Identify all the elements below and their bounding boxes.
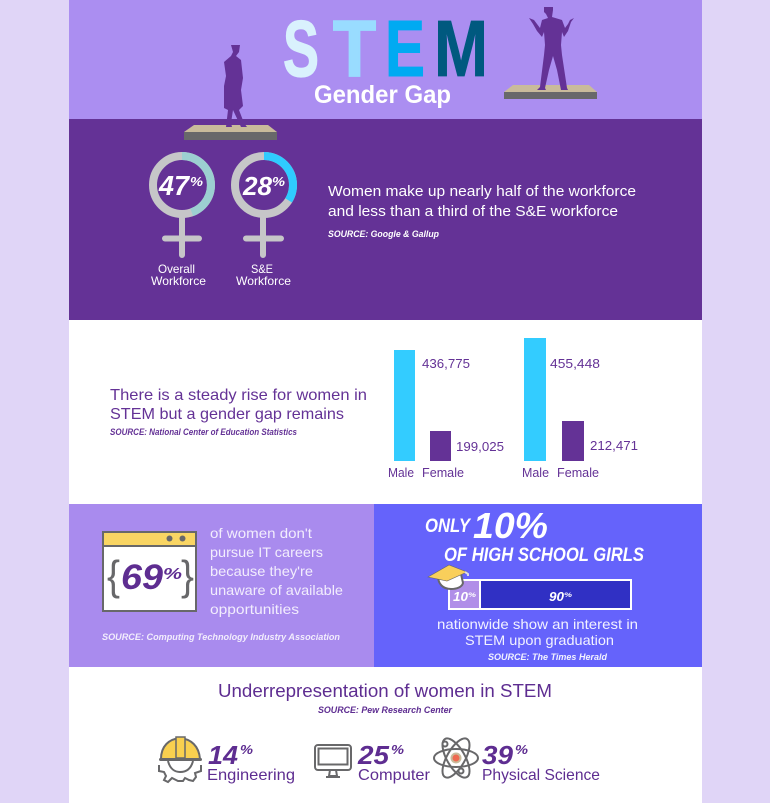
text: nationwide statement: STEM upon graduation — [465, 632, 614, 648]
icon: female symbol 28%: % — [272, 174, 285, 189]
bar chart: graduates by gender: 212,471 — [590, 438, 638, 453]
title: STEM: T — [333, 4, 376, 93]
icon: female symbol 28%: 28 — [242, 171, 273, 201]
text: workforce statement — [328, 183, 636, 239]
heading: underrepresentation: Underrepresentation of women in STEM — [218, 681, 552, 701]
text: steady rise statement: There is a steady rise for women in — [110, 387, 367, 404]
panel: steady rise — [69, 320, 702, 504]
label: Overall Workforce: Workforce — [151, 274, 206, 288]
icon: female symbol 47% — [153, 156, 211, 255]
text: IT careers statement: opportunities — [210, 601, 299, 617]
text: steady rise statement — [110, 387, 367, 437]
heading: only 10% of high school girls — [425, 505, 644, 566]
bar chart: graduates by gender: Male — [522, 465, 549, 480]
stat: computer 25%: % — [391, 742, 404, 757]
label: Overall Workforce: Overall — [158, 262, 195, 276]
bar chart: graduates by gender: Female — [557, 465, 599, 480]
text: steady rise statement: SOURCE: National Center of Education Statistics — [110, 427, 297, 437]
text: steady rise statement: STEM but a gender gap remains — [110, 406, 344, 423]
text: IT careers statement: of women don't — [210, 525, 312, 541]
icon: browser window with 69%: % — [163, 566, 182, 583]
stat: physical science 39%: 39 — [482, 740, 514, 770]
text: workforce statement: and less than a third of the S&E workforce — [328, 203, 618, 220]
label: S&E Workforce — [236, 262, 291, 288]
icon: female symbol 47%: 47 — [158, 170, 190, 201]
icon: browser window with 69%: { — [107, 552, 120, 599]
stat: engineering 14%: % — [240, 742, 253, 757]
text: IT careers statement — [210, 525, 343, 617]
icon: browser window with 69% — [103, 532, 196, 611]
text: nationwide statement — [437, 616, 638, 648]
stat: physical science 39%: % — [515, 742, 528, 757]
subtitle: Gender Gap: Gender Gap — [314, 81, 451, 109]
icon: browser window with 69%: 69 — [121, 558, 164, 597]
heading: only 10% of high school girls: OF HIGH SCHOOL GIRLS — [444, 545, 644, 566]
source: Pew: SOURCE: Pew Research Center — [318, 705, 452, 715]
panel: underrepresentation — [69, 667, 702, 803]
chart: 10 vs 90 bar — [449, 580, 631, 609]
text: IT careers statement: pursue IT careers — [210, 544, 323, 560]
title: STEM: M — [434, 4, 488, 93]
chart: 10 vs 90 bar: % — [468, 593, 477, 599]
icon: atom — [434, 734, 478, 782]
heading: only 10% of high school girls: 10% — [473, 505, 548, 546]
text: workforce statement: Women make up nearly half of the workforce — [328, 183, 636, 200]
label: Overall Workforce — [151, 262, 206, 288]
icon: female symbol 28% — [235, 156, 293, 255]
icon: man silhouette on platform — [504, 7, 597, 99]
stat: engineering 14%: 14 — [208, 740, 239, 770]
icon: graduation cap — [428, 565, 468, 589]
title: STEM — [283, 4, 488, 93]
panel: 69 percent IT careers — [69, 504, 374, 667]
stat: engineering 14% — [207, 740, 295, 784]
stat: computer 25%: 25 — [357, 740, 390, 770]
text: IT careers statement: because they're — [210, 563, 313, 579]
chart: 10 vs 90 bar: % — [564, 593, 573, 599]
chart: 10 vs 90 bar: 10 — [453, 589, 469, 604]
bar chart: graduates by gender: Male — [388, 465, 414, 480]
icon: woman silhouette on platform — [184, 45, 277, 140]
label: S&E Workforce: S&E — [251, 262, 273, 276]
text: nationwide statement: nationwide show an interest in — [437, 616, 638, 632]
bar chart: graduates by gender — [388, 338, 638, 480]
stat: engineering 14%: Engineering — [207, 767, 295, 784]
text: workforce statement: SOURCE: Google & Gallup — [328, 229, 439, 239]
bar chart: graduates by gender: Female — [422, 465, 464, 480]
title: STEM: E — [385, 4, 425, 93]
panel: high school girls — [374, 504, 702, 667]
label: S&E Workforce: Workforce — [236, 274, 291, 288]
bar chart: graduates by gender: 199,025 — [456, 439, 504, 454]
icon: computer monitor — [315, 745, 351, 777]
icon: browser window with 69%: } — [181, 552, 194, 599]
panel: workforce share — [69, 119, 702, 320]
stat: physical science 39% — [482, 740, 600, 784]
bar chart: graduates by gender: 436,775 — [422, 356, 470, 371]
stat: computer 25% — [357, 740, 431, 784]
stat: physical science 39%: Physical Science — [482, 767, 600, 784]
chart: 10 vs 90 bar: 90 — [549, 589, 565, 604]
bar chart: graduates by gender: 455,448 — [550, 356, 600, 371]
icon: female symbol 47%: % — [190, 174, 203, 189]
source: CompTIA: SOURCE: Computing Technology Industry Association — [102, 632, 341, 642]
stat: computer 25%: Computer — [358, 767, 431, 784]
panel: header — [69, 0, 702, 119]
icon: hard hat and gear — [159, 737, 202, 782]
title: STEM: S — [283, 4, 319, 93]
heading: only 10% of high school girls: ONLY — [425, 516, 472, 537]
source: The Times Herald: SOURCE: The Times Herald — [488, 652, 607, 662]
text: IT careers statement: unaware of available — [210, 582, 343, 598]
